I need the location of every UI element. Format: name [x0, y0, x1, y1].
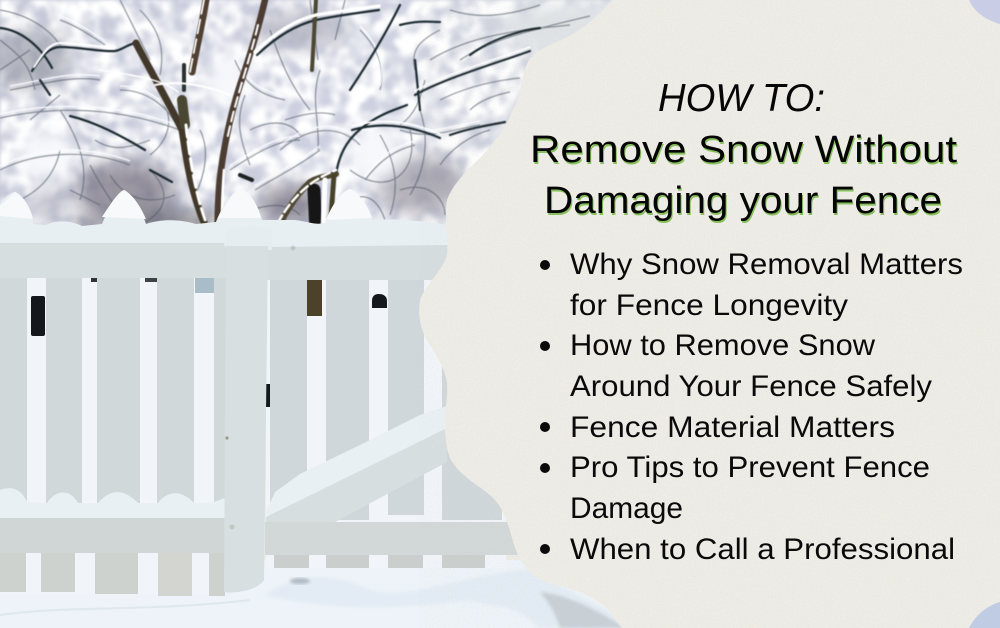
snow on twigs: [0, 16, 480, 186]
bullet list: [540, 248, 963, 566]
bullet item: fence material matters: Fence Material Matters: [570, 411, 895, 444]
photo: snow ground: [0, 560, 640, 628]
photo: snowy trees background: [0, 0, 612, 226]
brown tree trunks: [132, 0, 340, 224]
lower rail right: [265, 522, 525, 555]
left panel pickets: [0, 278, 226, 596]
pale mist at lower left and right: [15, 5, 620, 183]
bullet item: why snow removal matters: for Fence Longevity: [570, 289, 848, 322]
mauve shadow thickets: [0, 10, 465, 236]
bullet item: how to remove snow: [540, 329, 932, 403]
dark objects seen through the fence: [31, 278, 387, 407]
bullet item: pro tips: Pro Tips to Prevent Fence: [570, 451, 930, 484]
post top snow: [226, 226, 272, 250]
fence gaps showing snow behind: [0, 276, 225, 594]
lower rail left: [0, 518, 225, 553]
dark branches: [0, 5, 540, 182]
bullet item: why snow removal matters: [540, 248, 963, 322]
small knots and stains: [225, 246, 296, 530]
right panel pickets: [270, 280, 502, 568]
diagonal brace: [266, 405, 450, 522]
upper rail left: [0, 243, 226, 278]
bullet item: why snow removal matters: Why Snow Removal Matters: [570, 248, 963, 281]
corner accent: bottom right: [969, 602, 1000, 628]
heading: remove snow title: [530, 129, 957, 222]
fence post: [224, 246, 268, 592]
bullet item: when to call a professional: When to Call a Professional: [570, 533, 955, 566]
heading: how to: HOW TO:: [658, 77, 825, 120]
snow ledge with scallops on lower rail: [0, 488, 225, 520]
snow on branches: [34, 0, 530, 235]
corner accent: top right: [969, 0, 1000, 24]
white picket fence: [0, 188, 525, 596]
fine grey twigs: [0, 0, 590, 225]
upper rail right: [266, 245, 450, 280]
heading: remove snow title: Remove Snow Without: [530, 129, 957, 171]
bullet item: how to remove snow: How to Remove Snow: [570, 329, 876, 362]
picket tips: [0, 188, 372, 220]
heading: remove snow title: Damaging your Fence: [544, 180, 942, 222]
paper blob panel: [419, 0, 1000, 628]
bullet item: pro tips: Damage: [570, 492, 683, 525]
bullet item: how to remove snow: Around Your Fence Safely: [570, 370, 932, 403]
bullet item: pro tips: [540, 451, 930, 525]
snow cap with picket points: [0, 188, 448, 247]
